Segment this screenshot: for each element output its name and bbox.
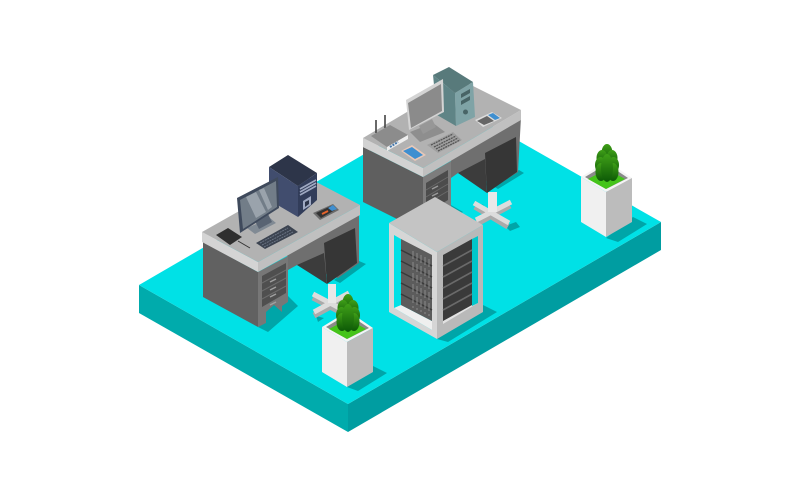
desk body: front left bbox=[203, 212, 359, 327]
desk body: back right bbox=[363, 117, 521, 232]
desk: back right bbox=[363, 67, 521, 232]
leaves bbox=[336, 294, 360, 332]
desk: front left bbox=[202, 155, 360, 327]
keyboard: navy bbox=[256, 225, 298, 249]
server units: left bbox=[401, 239, 432, 321]
potted plant: right bbox=[581, 144, 632, 237]
rack opening: right bbox=[443, 236, 478, 324]
potted plant: front bbox=[322, 294, 373, 387]
office chair: front left bbox=[297, 228, 357, 316]
platform bbox=[139, 103, 661, 432]
calculator bbox=[475, 112, 502, 127]
desk top: back right bbox=[363, 80, 521, 177]
monitor: grey bbox=[406, 79, 445, 142]
monitor: navy bbox=[237, 177, 279, 234]
keyboard: grey bbox=[427, 132, 462, 153]
phone device bbox=[313, 204, 339, 220]
router bbox=[371, 115, 408, 151]
leaves bbox=[595, 144, 619, 182]
tablet bbox=[401, 145, 426, 161]
rack opening: left bbox=[394, 235, 432, 330]
black device with cable bbox=[216, 228, 250, 248]
computer tower: teal bbox=[433, 67, 475, 126]
server units: right bbox=[443, 239, 472, 321]
desk top: front left bbox=[202, 175, 360, 272]
computer tower: navy bbox=[269, 155, 317, 217]
server rack bbox=[389, 197, 483, 339]
floor shadows bbox=[258, 170, 647, 391]
office chair: back right bbox=[458, 137, 517, 226]
